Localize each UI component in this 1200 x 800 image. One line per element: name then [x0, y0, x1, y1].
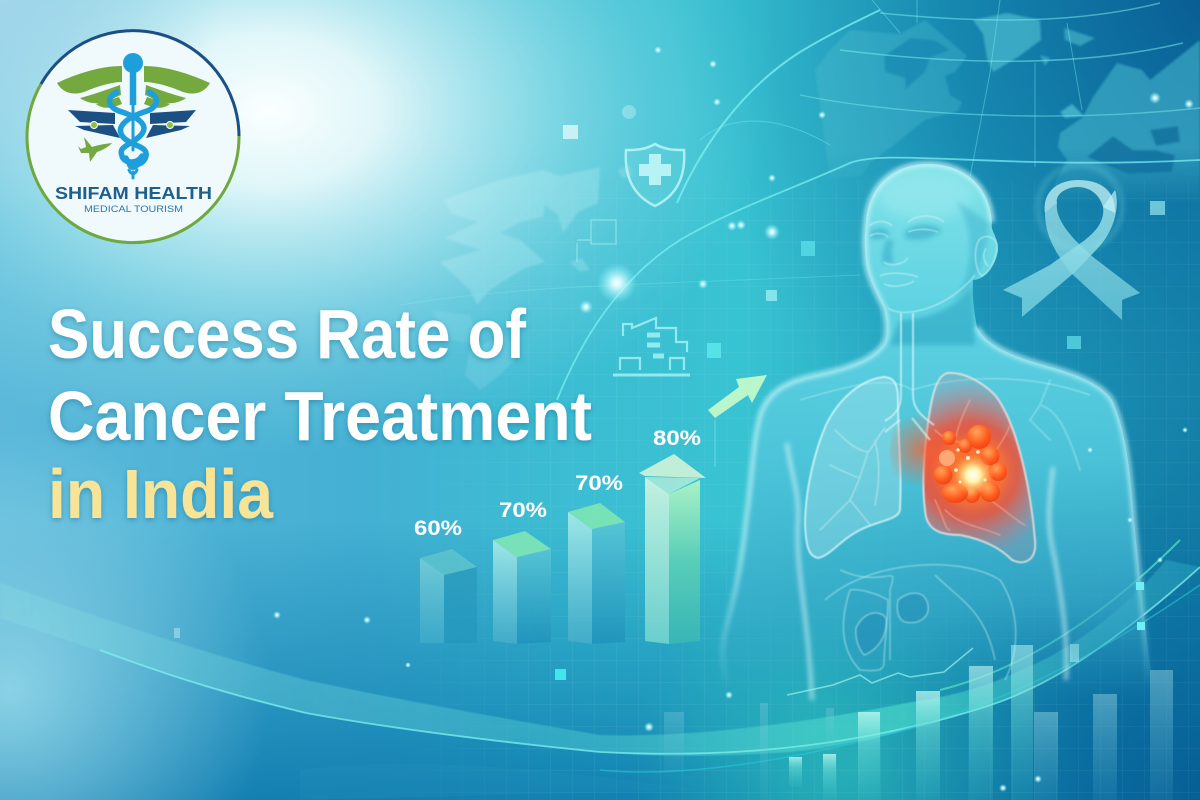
logo tagline: MEDICAL TOURISM — [84, 204, 183, 214]
title line 2: Cancer Treatment — [48, 377, 592, 455]
trachea and bronchi — [885, 313, 934, 440]
arrow: upward growth — [708, 375, 767, 418]
bronchial branches — [820, 380, 1080, 535]
logo serpents — [110, 92, 156, 178]
right lung with red glow — [923, 373, 1035, 562]
body rim light — [723, 164, 1148, 690]
logo green wings — [57, 66, 210, 108]
title — [48, 295, 592, 533]
tumour cluster — [934, 425, 1009, 508]
human figure — [723, 164, 1155, 700]
logo name: SHIFAM HEALTH — [55, 183, 212, 203]
bar 1: 60% — [414, 517, 477, 643]
facial shading — [870, 200, 988, 345]
bar 4: 80% with arrow roof: 80% — [653, 427, 701, 450]
bar 3: 70%: 70% — [575, 472, 623, 495]
inner arm lines — [787, 443, 1066, 700]
logo ring green — [27, 84, 239, 243]
icon: square placeholder node — [577, 220, 616, 262]
logo staff — [130, 72, 136, 105]
floating squares and sparkles — [174, 46, 1194, 792]
head highlight — [877, 171, 973, 219]
body silhouette — [723, 164, 1155, 700]
logo ring navy — [41, 31, 239, 136]
light bands sweeping across the bottom — [0, 540, 1200, 800]
logo circle — [28, 31, 238, 241]
world map: upper-right continents — [815, 13, 1200, 210]
bar 4: 80% with arrow roof — [639, 427, 706, 644]
cancer awareness ribbon — [1003, 165, 1140, 320]
world map: pale continents behind title — [432, 165, 632, 390]
growth bar chart — [414, 427, 706, 644]
bar 2: 70% — [493, 499, 551, 644]
rising line trend — [787, 648, 973, 695]
left lung — [805, 377, 901, 558]
bar 3: 70% — [568, 472, 625, 644]
logo badge — [27, 31, 239, 243]
abdominal organs — [825, 565, 1016, 680]
logo staff ball — [123, 53, 143, 73]
icon: hospital building — [613, 318, 690, 375]
globe arcs and meridians — [400, 0, 1200, 467]
icon: shield with medical cross — [626, 144, 684, 206]
bar 2: 70%: 70% — [499, 499, 547, 522]
chest and collarbone shading — [800, 379, 1090, 400]
mediastinum glow — [890, 400, 950, 504]
title line 1: Success Rate of — [48, 295, 527, 373]
title line 3: in India — [48, 455, 274, 533]
bottom-right bar chart backdrop — [664, 644, 1173, 800]
face details — [869, 216, 997, 312]
logo aeroplane — [78, 137, 112, 162]
logo navy wings — [68, 110, 196, 138]
bar 1: 60%: 60% — [414, 517, 462, 540]
